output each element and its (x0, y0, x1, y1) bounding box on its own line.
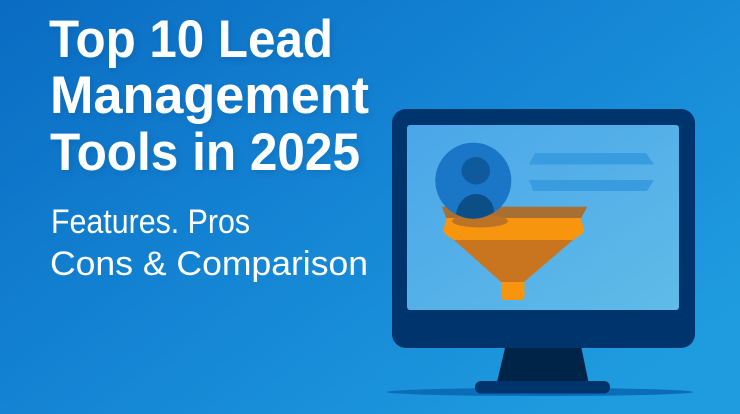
monitor stand (497, 346, 588, 382)
monitor body (392, 109, 695, 348)
monitor shadow (387, 388, 693, 396)
funnel back rim (442, 207, 587, 219)
monitor screen (407, 125, 679, 310)
funnel rim (443, 218, 584, 240)
funnel opening (452, 214, 508, 228)
title: Top 10 Lead (49, 10, 333, 69)
icon: funnel (442, 207, 587, 300)
monitor base (475, 381, 610, 394)
subtitle (50, 203, 368, 283)
title: Management (50, 66, 369, 125)
title (49, 10, 369, 182)
funnel spout (501, 282, 524, 300)
icon: computer monitor with lead funnel (387, 109, 695, 396)
subtitle: Features. Pros (51, 203, 250, 241)
icon: user avatar (435, 143, 511, 219)
subtitle: Cons & Comparison (50, 245, 368, 283)
title: Tools in 2025 (50, 123, 360, 182)
text placeholder lines (529, 153, 654, 191)
funnel cone (454, 240, 573, 282)
